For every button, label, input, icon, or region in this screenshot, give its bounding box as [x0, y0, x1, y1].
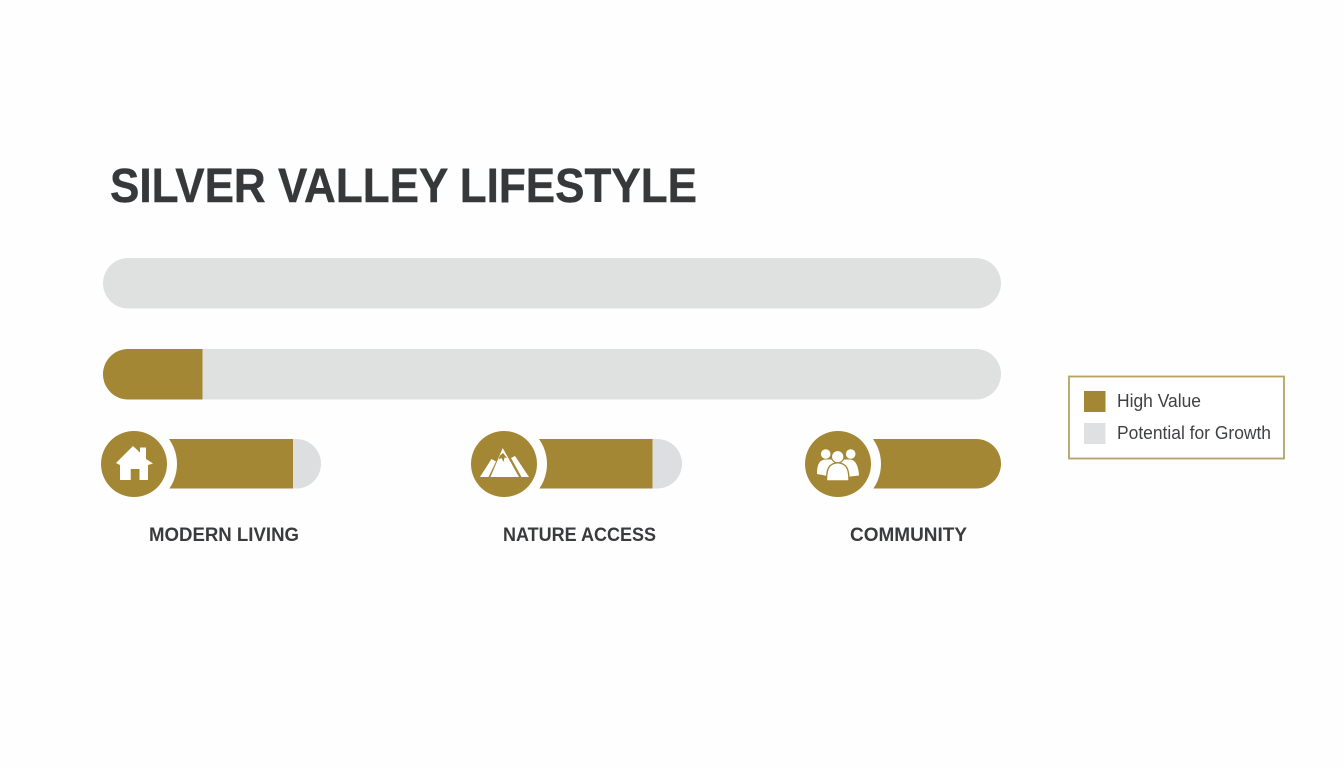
- top bar: full potential track: [103, 258, 1001, 308]
- label: community: COMMUNITY: [850, 524, 967, 546]
- legend text: potential for growth: Potential for Growth: [1117, 423, 1271, 443]
- second bar: partial high value: [103, 349, 1001, 400]
- label: modern living: MODERN LIVING: [149, 524, 299, 546]
- legend text: high value: High Value: [1117, 391, 1201, 411]
- icon: mountains: [480, 448, 529, 477]
- community ring cutout: [795, 421, 881, 507]
- legend swatch: potential for growth: [1084, 423, 1106, 444]
- legend frame: [1069, 376, 1284, 458]
- icon: house: [116, 446, 153, 480]
- panel: nature access: [471, 431, 682, 541]
- legend: [1069, 376, 1284, 458]
- legend swatch: high value: [1084, 391, 1106, 412]
- title: SILVER VALLEY LIFESTYLE: [110, 160, 697, 213]
- panel: modern living: [101, 431, 321, 541]
- label: nature access: NATURE ACCESS: [503, 524, 656, 546]
- nature access ring cutout: [461, 421, 547, 507]
- nature access icon badge: [471, 431, 537, 497]
- modern living ring cutout: [91, 421, 177, 507]
- community icon badge: [805, 431, 871, 497]
- nature access progress bar: [539, 439, 682, 488]
- panel: community: [805, 431, 1001, 541]
- icon: people: [817, 449, 859, 481]
- modern living progress bar: [169, 439, 321, 488]
- modern living icon badge: [101, 431, 167, 497]
- community progress bar: [873, 439, 1001, 488]
